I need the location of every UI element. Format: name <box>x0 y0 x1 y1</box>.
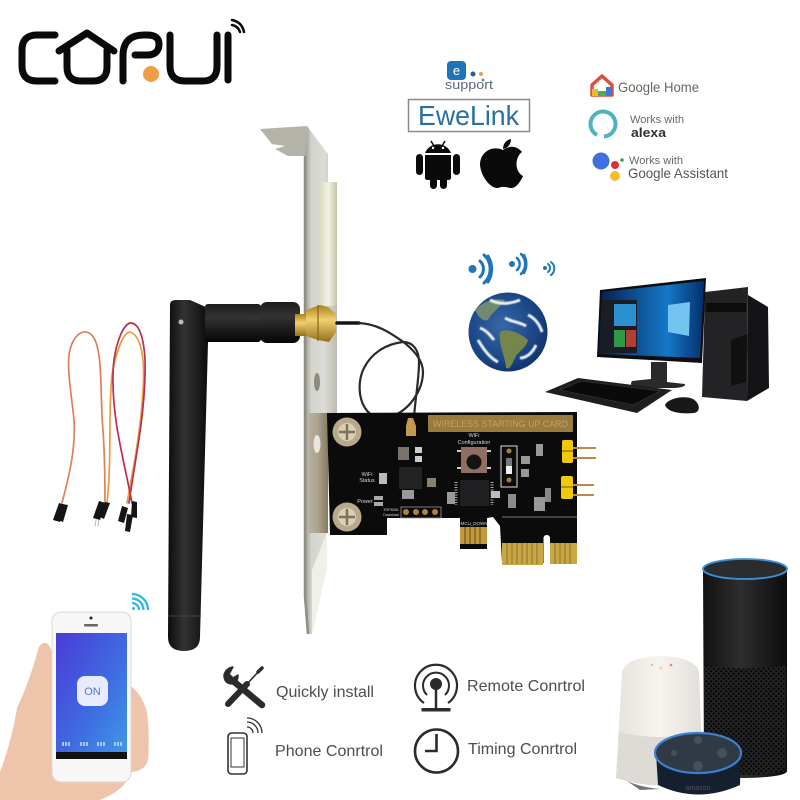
board silkscreen labels: ESP8266 <box>384 508 398 512</box>
PCB card <box>327 412 596 565</box>
icon: android <box>416 141 460 189</box>
Google Home <box>616 656 703 790</box>
board silkscreen labels: Download <box>383 513 399 517</box>
Google Assistant <box>592 152 728 181</box>
antenna rod <box>168 300 208 651</box>
board silkscreen labels: Power <box>357 499 373 505</box>
header pads <box>401 507 441 518</box>
icon: apple <box>480 139 523 188</box>
yellow jumper headers <box>561 440 596 499</box>
slide switch <box>501 446 517 487</box>
board silkscreen labels: WiFi <box>362 472 372 478</box>
logo: CoRUI <box>22 20 244 82</box>
MCU gold pad <box>460 527 487 544</box>
antenna barrel <box>205 304 261 342</box>
board silkscreen labels: Configuration <box>458 440 490 446</box>
board silkscreen labels: MCU_DOWN <box>460 521 488 526</box>
ON button <box>77 676 108 706</box>
wifi icon cyan <box>132 594 148 610</box>
wire connector tips <box>53 501 137 532</box>
Google Assistant: Google Assistant <box>628 165 728 181</box>
alexa: alexa <box>631 125 667 140</box>
board silkscreen labels <box>357 433 490 526</box>
monitor <box>597 278 706 363</box>
jumper wires <box>53 323 145 532</box>
board silkscreen labels: Status <box>359 478 375 484</box>
PCB board <box>327 412 577 563</box>
phone <box>52 612 131 782</box>
alexa <box>591 112 684 140</box>
eWeLink support panel <box>408 61 530 189</box>
keyboard <box>545 378 672 413</box>
Google Assistant: Works with <box>629 155 683 167</box>
SMA gold connector <box>295 305 336 342</box>
icon: e support: e <box>453 63 460 78</box>
ICs and small parts <box>374 444 551 511</box>
smart speakers <box>616 559 787 794</box>
tower <box>702 287 769 401</box>
mouse <box>665 397 699 413</box>
config button <box>457 447 491 473</box>
bracket standoff cylinder <box>320 182 337 306</box>
icon: clock <box>415 730 458 772</box>
alexa: Works with <box>630 114 684 126</box>
Echo Dot <box>655 733 741 794</box>
EweLink box: EweLink <box>418 100 520 131</box>
earth <box>468 292 548 372</box>
desktop computer <box>545 278 769 413</box>
antenna coax cable <box>337 323 423 418</box>
Echo Dot: amazon <box>686 785 711 792</box>
bracket lower plate <box>308 413 328 533</box>
antenna <box>168 300 336 651</box>
u.fl connector <box>406 418 416 436</box>
label: Remote Conrtrol: Remote Conrtrol <box>467 678 585 695</box>
hand holding phone <box>0 594 149 800</box>
globe with wifi signal <box>468 254 554 372</box>
icon: phone with signal <box>228 718 262 774</box>
icon: e support: support <box>445 77 493 92</box>
label: Phone Conrtrol: Phone Conrtrol <box>275 743 383 760</box>
board silkscreen labels: WiFi <box>468 433 480 439</box>
mounting screws <box>332 418 362 532</box>
icon: e support <box>445 61 493 92</box>
Google Home: Google Home <box>618 79 699 95</box>
PCI bracket <box>260 126 337 634</box>
Amazon Echo <box>703 559 787 778</box>
feature list <box>224 665 585 774</box>
icon: tools <box>224 667 262 705</box>
ON button: ON <box>84 686 101 698</box>
hand <box>0 643 149 800</box>
label: Quickly install: Quickly install <box>276 684 374 701</box>
gold label strip: WIRELESS STARTING UP CARD <box>433 419 568 429</box>
gold label strip <box>428 415 573 432</box>
PCIe gold fingers <box>502 517 577 565</box>
monitor stand <box>631 362 685 388</box>
wifi signals <box>468 254 554 283</box>
icon: remote antenna <box>415 665 457 712</box>
compatibility logos <box>591 76 728 181</box>
label: Timing Conrtrol: Timing Conrtrol <box>468 741 577 758</box>
